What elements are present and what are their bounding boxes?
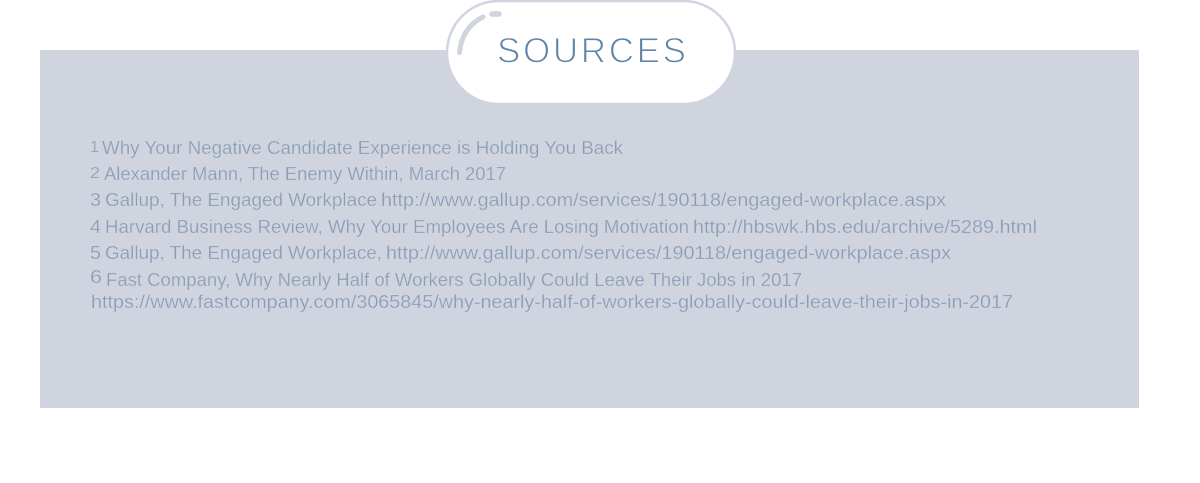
icon: pill highlight xyxy=(460,14,499,52)
source 4: Harvard Business Review, Why Your Employees Are Losing Motivation xyxy=(105,217,689,237)
source 5: Gallup, The Engaged Workplace, xyxy=(105,243,382,263)
source 5: 5 xyxy=(90,243,101,263)
title: SOURCES xyxy=(497,32,686,70)
source 6: 6 xyxy=(90,267,102,287)
source 6: https://www.fastcompany.com/3065845/why-nearly-half-of-workers-globally-could-leave-their-jobs-in-2017 xyxy=(91,292,1013,312)
source 2: 2 xyxy=(90,165,100,182)
panel: sources background xyxy=(40,50,1139,408)
source 3 xyxy=(90,190,946,210)
heading pill xyxy=(447,1,735,104)
source 3: http://www.gallup.com/services/190118/engaged-workplace.aspx xyxy=(381,190,946,210)
source 4: http://hbswk.hbs.edu/archive/5289.html xyxy=(693,217,1037,237)
source 5: http://www.gallup.com/services/190118/engaged-workplace.aspx xyxy=(386,243,951,263)
source list xyxy=(90,138,1037,312)
source 1: 1 xyxy=(90,139,99,156)
source 2: Alexander Mann, The Enemy Within, March 2017 xyxy=(104,164,506,184)
source 3: 3 xyxy=(90,190,101,210)
source 4 xyxy=(90,217,1037,237)
source 6 xyxy=(90,267,1013,312)
source 5 xyxy=(90,243,951,263)
source 1: Why Your Negative Candidate Experience is Holding You Back xyxy=(102,138,624,158)
source 3: Gallup, The Engaged Workplace xyxy=(105,190,377,210)
source 6: Fast Company, Why Nearly Half of Workers Globally Could Leave Their Jobs in 2017 xyxy=(106,270,802,290)
source 4: 4 xyxy=(90,217,101,237)
